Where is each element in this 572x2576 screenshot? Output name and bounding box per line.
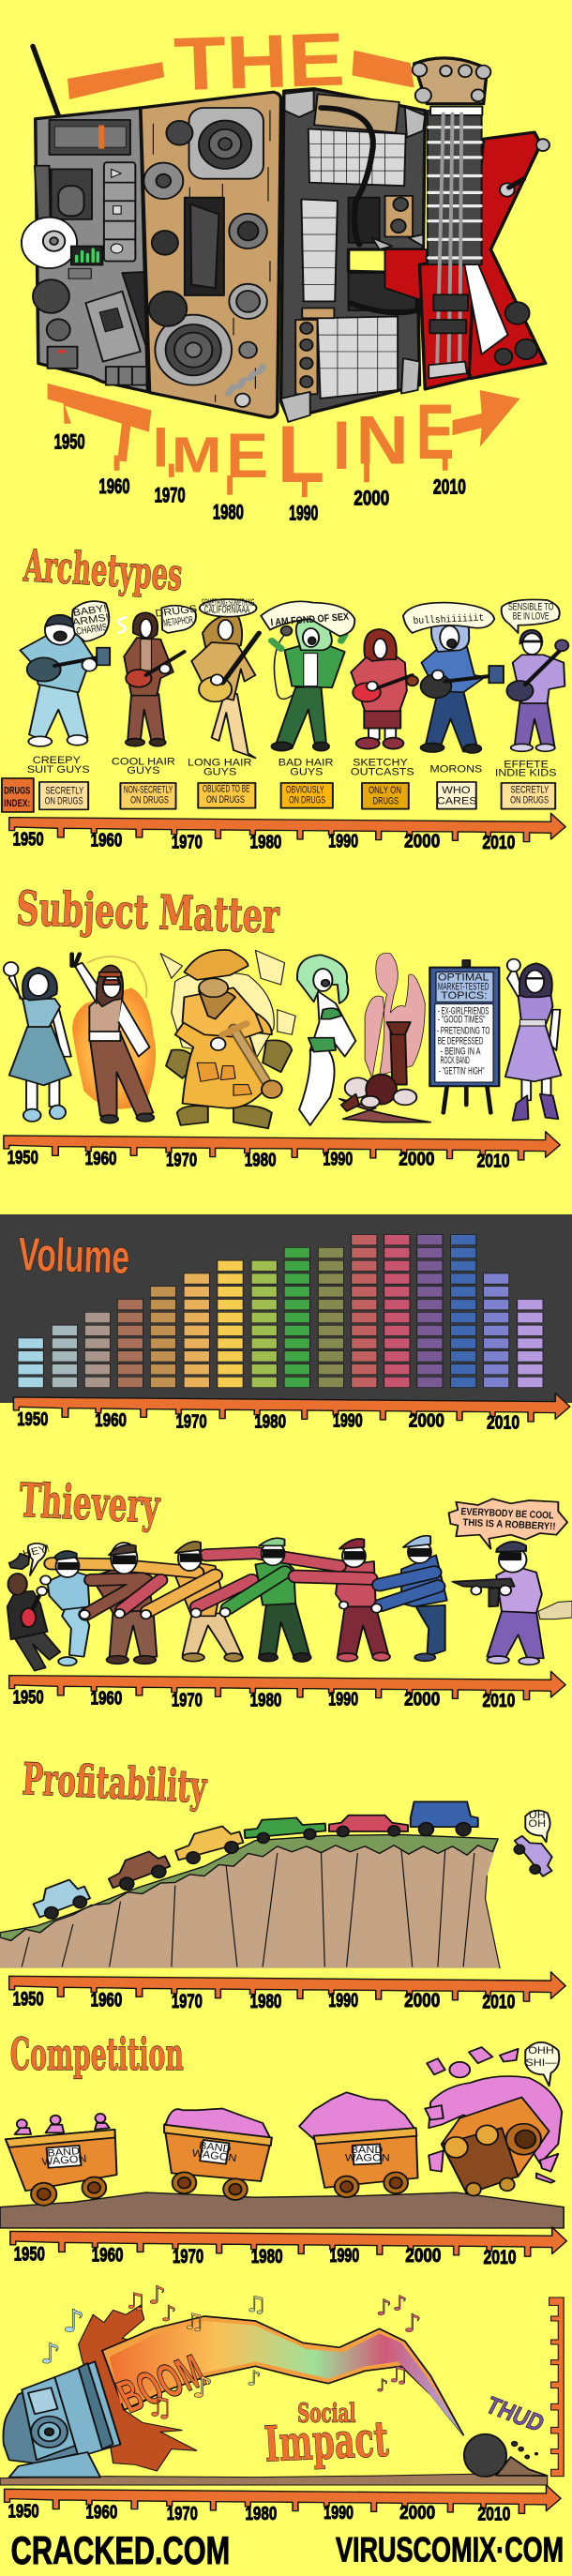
archetype names: MORONS xyxy=(429,764,483,775)
timeline arrow: subject matter: 2010 xyxy=(477,1150,510,1171)
bandwagon 3 xyxy=(299,2092,418,2197)
timeline arrow: thievery: 2000 xyxy=(404,1688,440,1710)
figure: 2010s indie girl xyxy=(505,959,561,1121)
masked thieves chain xyxy=(37,1536,447,1665)
timeline arrow: subject matter: 1960 xyxy=(85,1148,117,1169)
sign: optimal market-tested topics xyxy=(429,960,499,1113)
title timeline years: 1970 xyxy=(155,484,186,506)
heading: Thievery: Thievery xyxy=(18,1473,162,1533)
speech bubble: california: CALIFORNIAAA xyxy=(204,605,249,615)
musical notes: ♫ xyxy=(245,2291,267,2317)
archetype names: EFFETE xyxy=(504,760,549,770)
drugs index row: ON DRUGS xyxy=(289,795,325,806)
musical notes: ♪ xyxy=(403,2309,422,2338)
timeline arrow: volume: 2010 xyxy=(487,1411,519,1433)
timeline arrow: social impact: 1980 xyxy=(245,2503,277,2524)
timeline arrow: profitability: 2010 xyxy=(482,1990,515,2012)
musical notes: ♪ xyxy=(160,2300,177,2327)
musical notes: ♪ xyxy=(392,2291,407,2315)
bandwagon 3: WAGON xyxy=(345,2152,390,2163)
dark volume background xyxy=(0,1214,572,1403)
archetype names: COOL HAIR xyxy=(112,757,175,767)
musical notes: ♪ xyxy=(247,2366,262,2390)
drugs index row: OBVIOUSLY xyxy=(286,785,324,795)
title timeline years: 2000 xyxy=(354,486,389,509)
timeline arrow: profitability: 2000 xyxy=(404,1988,440,2011)
timeline arrow: social impact: 1990 xyxy=(324,2502,354,2523)
drugs index row: ONLY ON xyxy=(369,786,401,796)
speech bubble: bullshit: bullshiiiiiit xyxy=(413,612,485,627)
musical notes: ♪ xyxy=(62,2302,85,2340)
musical notes: ♫ xyxy=(183,2308,205,2334)
title word: TIMELINE with arrow: T xyxy=(101,396,148,479)
equalizer bar chart xyxy=(31,1234,530,1388)
archetype names: GUYS xyxy=(290,767,324,777)
timeline arrow: volume: 1990 xyxy=(333,1409,363,1431)
timeline arrow: subject matter: 1990 xyxy=(323,1148,353,1169)
title timeline years: 1980 xyxy=(213,500,244,523)
cars climbing the cliff xyxy=(29,1801,559,1922)
timeline arrow: thievery: 1950 xyxy=(13,1686,44,1708)
timeline arrow: profitability: 1990 xyxy=(328,1988,358,2011)
timeline arrow: volume: 1970 xyxy=(176,1410,207,1432)
figure: robbed blues man xyxy=(8,1554,60,1671)
text: THUD: THUD xyxy=(481,2391,549,2437)
speech bubble: drugs metaphor: DRUGS xyxy=(155,604,198,619)
heading: Competition: Competition xyxy=(10,2028,184,2080)
speech bubble: drugs metaphor: METAPHOR xyxy=(163,615,194,629)
timeline arrow: subject matter: 2000 xyxy=(399,1148,434,1169)
timeline arrow: profitability: 1950 xyxy=(13,1987,44,2010)
speech bubble: uh oh: OH xyxy=(528,1818,546,1830)
heading: Archetypes: Archetypes xyxy=(22,539,185,600)
musical notes: ♪ xyxy=(376,2375,388,2396)
sign: optimal market-tested topics: - PRETENDING TO xyxy=(437,1026,489,1036)
title word: TIMELINE with arrow xyxy=(48,384,519,500)
timeline arrow: competition: 2000 xyxy=(405,2243,441,2267)
figure: 1950s girl xyxy=(4,962,71,1122)
panel: thievery xyxy=(8,1473,572,1711)
panel: title xyxy=(22,17,549,524)
figure: sketchy outcast xyxy=(351,629,418,749)
timeline arrow: competition: 2010 xyxy=(484,2245,517,2268)
title word: TIMELINE with arrow: M xyxy=(172,427,222,483)
guitar letter K xyxy=(385,58,549,389)
timeline arrow: archetypes: 2000 xyxy=(404,830,440,851)
sign: optimal market-tested topics: TOPICS: xyxy=(441,991,488,1002)
timeline arrow: archetypes: 1960 xyxy=(90,829,122,851)
panel: profitability and competition xyxy=(0,1753,566,2268)
timeline arrow: social impact: 1950 xyxy=(8,2500,39,2522)
timeline arrow: volume: 1960 xyxy=(95,1409,127,1431)
figure: cool hair guy xyxy=(118,612,184,746)
timeline arrow: archetypes: 2010 xyxy=(482,832,515,853)
timeline arrow: competition: 1970 xyxy=(173,2244,203,2267)
heading: Social Impact: Social xyxy=(297,2398,355,2429)
drugs index row: ON DRUGS xyxy=(510,795,549,806)
panel: social impact xyxy=(0,2281,564,2572)
musical notes: ♪ xyxy=(148,2281,166,2310)
drugs index row: CARES xyxy=(437,796,477,806)
sign: optimal market-tested topics: BE DEPRESSED xyxy=(438,1036,483,1047)
timeline arrow: volume: 1980 xyxy=(254,1410,286,1432)
ground xyxy=(0,2192,564,2228)
flames xyxy=(79,2305,197,2471)
title timeline years: 1990 xyxy=(289,501,318,524)
ruler bracket xyxy=(549,2297,564,2477)
drugs index row: WHO xyxy=(442,786,471,796)
musical notes: ♫ xyxy=(146,2392,173,2423)
figure: bad hair guy xyxy=(271,617,345,751)
timeline arrow: competition: 1960 xyxy=(92,2243,124,2266)
sign: optimal market-tested topics: - "GOOD TIMES" xyxy=(438,1015,486,1025)
title timeline years: 1960 xyxy=(98,475,130,498)
heading: Social Impact: Impact xyxy=(263,2411,390,2473)
archetype names xyxy=(27,756,557,778)
heading: Subject Matter: Subject Matter xyxy=(15,881,281,943)
speech bubble: hey xyxy=(22,1544,52,1575)
bandwagon 4: overloaded and tipping xyxy=(425,2047,562,2195)
speech bubble: uh oh: UH xyxy=(529,1810,546,1821)
title word: TIMELINE with arrow: I xyxy=(153,416,169,479)
speech bubble: ohh shi xyxy=(525,2042,559,2086)
timeline arrow: archetypes xyxy=(9,813,565,853)
timeline arrow: competition: 1990 xyxy=(329,2243,359,2267)
drugs index row: ON DRUGS xyxy=(45,796,83,806)
timeline arrow: profitability xyxy=(9,1972,565,2012)
timeline arrow: profitability: 1960 xyxy=(90,1988,122,2011)
timeline arrow: profitability: 1970 xyxy=(172,1989,203,2012)
heading: Volume: Volume xyxy=(17,1228,130,1284)
drugs index row: DRUGS xyxy=(373,796,399,806)
speech bubble: sensible to be in love xyxy=(502,599,560,633)
musical notes: ♪ xyxy=(376,2294,392,2320)
musical notes xyxy=(40,2281,422,2423)
drugs index row: INDEX: xyxy=(4,799,30,809)
cliff xyxy=(0,1834,500,1968)
timeline arrow: thievery: 1960 xyxy=(90,1687,122,1709)
speech bubble: drugs metaphor xyxy=(155,604,198,633)
speech bubble: baby arms charms: CHARMS xyxy=(75,623,108,637)
speech bubble: baby arms charms xyxy=(71,601,110,641)
drugs index row: ON DRUGS xyxy=(130,795,169,806)
timeline arrow: social impact xyxy=(5,2485,561,2524)
rainbow sound stream xyxy=(102,2316,463,2435)
heading: Social Impact xyxy=(263,2398,390,2473)
sign: optimal market-tested topics: - BEING IN A xyxy=(441,1047,481,1057)
timeline arrow: competition xyxy=(10,2227,566,2268)
timeline arrow: social impact: 2010 xyxy=(477,2503,510,2524)
cannon boombox xyxy=(4,2361,120,2478)
archetype names: LONG HAIR xyxy=(188,758,251,768)
speech bubble: baby arms charms: BABY! xyxy=(72,603,108,619)
timeline arrow: subject matter: 1980 xyxy=(245,1149,277,1170)
drugs index row: SECRETLY xyxy=(45,786,83,796)
timeline arrow: social impact: 1970 xyxy=(167,2503,198,2524)
timeline arrow: subject matter: 1970 xyxy=(166,1149,197,1170)
musical notes: ♫ xyxy=(124,2288,147,2313)
title word: TIMELINE with arrow: N xyxy=(355,403,409,479)
speech bubble: ohh shi: OHH xyxy=(528,2045,554,2056)
title word: TIMELINE with arrow: I xyxy=(333,408,351,484)
panel: archetypes xyxy=(2,539,568,853)
timeline arrow: archetypes: 1990 xyxy=(328,830,358,851)
archetype names: SUIT GUYS xyxy=(27,765,90,776)
archetype names: OUTCASTS xyxy=(351,767,414,777)
panel: volume xyxy=(0,1214,572,1433)
title word: TIMELINE with arrow: E xyxy=(416,388,454,475)
timeline arrow: thievery xyxy=(9,1671,565,1711)
timeline arrow: profitability: 1980 xyxy=(250,1989,281,2012)
musical notes: ♪ xyxy=(191,2371,214,2405)
speech bubble: baby arms charms: ARMS! xyxy=(71,612,110,628)
sign: optimal market-tested topics: - EX-GIRLFRIENDS xyxy=(438,1006,489,1017)
panel: archetypes: SOMETHING SOMETHING xyxy=(202,598,254,609)
musical notes: ♪ xyxy=(40,2337,61,2370)
speech bubble: hey: HEY! xyxy=(22,1544,52,1559)
timeline arrow: archetypes: 1980 xyxy=(250,831,281,852)
timeline arrow: thievery: 2010 xyxy=(482,1690,515,1711)
speech bubble: uh oh xyxy=(525,1810,550,1842)
bandwagon 2: BAND xyxy=(198,2140,232,2155)
ground strip xyxy=(0,2474,548,2485)
figure: robber with tommy gun xyxy=(452,1542,572,1665)
speech bubble: bullshit xyxy=(403,603,494,633)
drugs index row: OBLIGED TO BE xyxy=(203,784,250,794)
bandwagon 1: WAGON xyxy=(41,2153,87,2168)
speech bubble: I am fond of sex: I AM FOND OF SEX xyxy=(270,612,350,628)
panel: subject matter xyxy=(4,881,561,1171)
icon: antenna xyxy=(33,46,58,115)
speech bubble: I am fond of sex xyxy=(261,601,354,636)
credit: Cracked.com: CRACKED.COM xyxy=(11,2528,230,2572)
bandwagon 2 xyxy=(164,2109,272,2200)
bandwagon 3: BAND xyxy=(351,2145,383,2156)
sign: optimal market-tested topics: OPTIMAL xyxy=(438,972,489,983)
title timeline years: 1950 xyxy=(54,429,85,453)
title word: TIMELINE with arrow: L xyxy=(278,410,324,500)
drugs index row: DRUGS xyxy=(4,786,30,796)
timeline arrow: subject matter xyxy=(4,1132,560,1171)
timeline arrow: thievery: 1970 xyxy=(172,1689,203,1710)
archetype names: GUYS xyxy=(203,767,237,777)
figure: 1970s wizard xyxy=(160,950,295,1128)
timeline arrow: volume xyxy=(13,1393,570,1433)
bandwagon 1: BAND xyxy=(47,2146,81,2160)
wooden speaker panel xyxy=(141,92,281,417)
timeline arrow: social impact: 2000 xyxy=(399,2502,435,2523)
timeline arrow: social impact: 1960 xyxy=(85,2501,117,2523)
speech bubble: everybody be cool xyxy=(449,1499,567,1549)
archetype names: CREEPY xyxy=(33,756,81,766)
timeline arrow: thievery: 1980 xyxy=(250,1689,281,1710)
title word: TIMELINE with arrow: E xyxy=(226,421,268,491)
timeline arrow: archetypes: 1950 xyxy=(13,828,44,850)
figure: 1980s pin-up xyxy=(297,955,355,1125)
figure: 1960s hippie with flame aura xyxy=(72,954,156,1123)
timeline arrow: competition: 1950 xyxy=(14,2242,45,2265)
heading: Profitability: Profitability xyxy=(21,1753,208,1813)
bomb ball and dirt xyxy=(464,2434,548,2477)
archetype names: BAD HAIR xyxy=(278,758,333,768)
speech bubble: california xyxy=(200,598,257,617)
figure: creepy suit guy xyxy=(20,615,110,746)
drugs index row xyxy=(2,778,555,812)
title word: THE: THE xyxy=(173,17,346,107)
figure: long hair guy xyxy=(191,614,259,758)
title timeline years xyxy=(54,429,466,524)
title word: THE xyxy=(68,17,414,107)
drugs index row: ON DRUGS xyxy=(206,795,245,806)
figure: moron xyxy=(421,616,504,753)
sign: optimal market-tested topics: MARKET-TESTED xyxy=(438,982,489,992)
timeline arrow: subject matter: 1950 xyxy=(8,1147,38,1168)
bandwagon 2: WAGON xyxy=(191,2147,237,2164)
archetype names: SKETCHY xyxy=(353,758,408,768)
sign: optimal market-tested topics: - "GETTIN' HIGH" xyxy=(439,1066,485,1077)
drugs index row: NON-SECRETLY xyxy=(124,785,173,795)
text: BOOM: BOOM xyxy=(109,2344,214,2423)
bandwagon 1 xyxy=(6,2114,117,2206)
sign: optimal market-tested topics: ROCK BAND xyxy=(441,1056,470,1066)
figure: effete indie kid xyxy=(506,630,568,751)
timeline arrow: archetypes: 1970 xyxy=(172,831,203,852)
speech bubble: ohh shi: SHI— xyxy=(525,2057,557,2069)
timeline arrow: thievery: 1990 xyxy=(328,1688,358,1710)
amplifier letter E xyxy=(281,89,436,422)
figure: 1990s ghosts and zombie arm xyxy=(339,953,430,1122)
timeline arrow: competition: 1980 xyxy=(251,2244,283,2267)
drugs index row: SECRETLY xyxy=(511,785,549,795)
archetype names: INDIE KIDS xyxy=(495,768,557,778)
boombox letter R xyxy=(22,108,148,392)
musical notes: ♫ xyxy=(386,2361,410,2388)
archetype names: GUYS xyxy=(127,766,160,776)
title timeline years: 2010 xyxy=(433,475,466,499)
timeline arrow: volume: 2000 xyxy=(409,1409,444,1431)
timeline arrow: volume: 1950 xyxy=(17,1409,48,1430)
